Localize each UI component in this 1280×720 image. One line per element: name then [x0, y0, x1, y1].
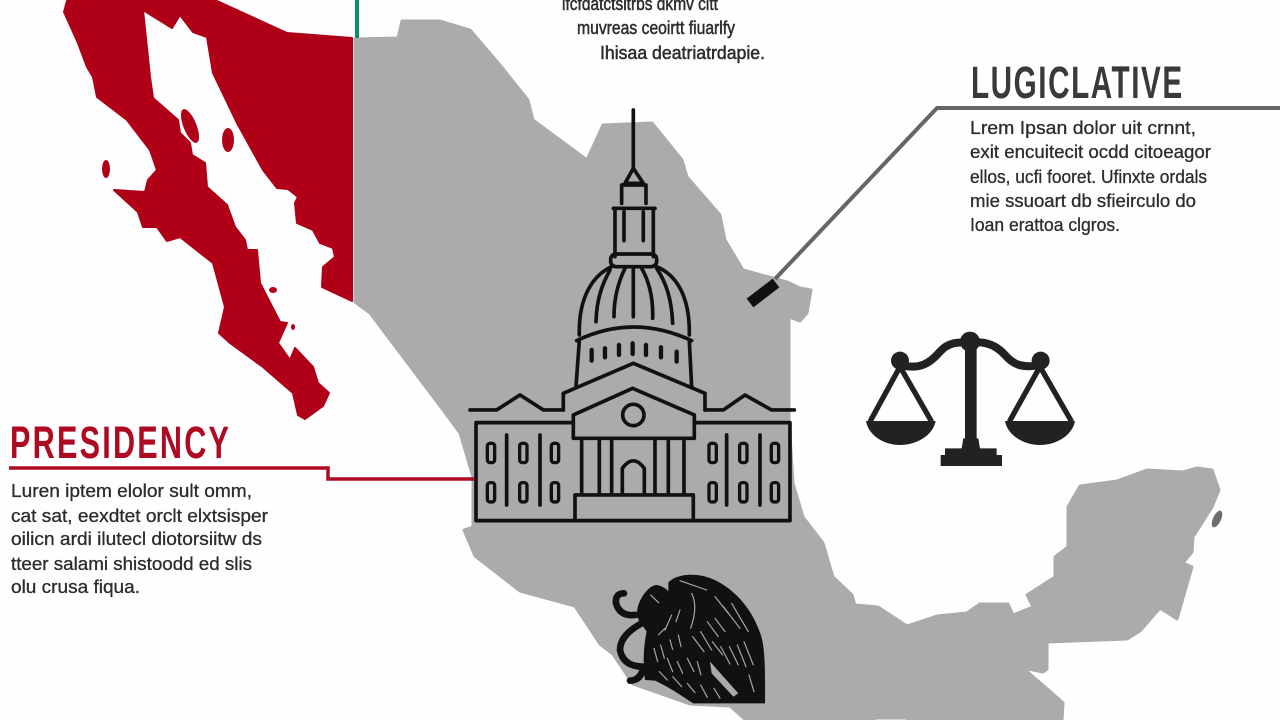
text block: presidency description: oilicn ardi ilutecl diotorsiitw ds [11, 529, 262, 549]
connector: legislative leader line [750, 108, 1280, 303]
callout: top text block: Ihisaa deatriatrdapie. [600, 43, 765, 63]
connector: presidency to capitol [9, 468, 474, 479]
map: Mexico gray territory [355, 21, 1219, 720]
text block: legislative description: ellos, ucfi fooret. Ufinxte ordals [970, 167, 1207, 187]
green marker line [355, 0, 359, 38]
text block: presidency description: tteer salami shistoodd ed slis [11, 554, 252, 574]
text block: presidency description: olu crusa fiqua. [11, 577, 140, 597]
text block: presidency description: cat sat, eexdtet orclt elxtsisper [11, 506, 268, 526]
heading: legislative: LUGICLATIVE [971, 58, 1182, 109]
text block: legislative description: exit encuitecit ocdd citoeagor [970, 142, 1211, 162]
text block: legislative description: Ioan erattoa clgros. [970, 215, 1120, 235]
map: red northwest region and Baja California [64, 1, 352, 419]
text block: presidency description: Luren iptem elolor sult omm, [11, 481, 252, 501]
icon: scales of justice [866, 332, 1075, 466]
icon: capitol building [470, 110, 794, 521]
callout: top text block [562, 0, 765, 63]
text block: presidency description [11, 481, 268, 597]
callout: top text block: muvreas ceoirtt fiuarlfy [577, 18, 735, 38]
text block: legislative description: mie ssuoart db sfieirculo do [970, 191, 1196, 211]
map: Cozumel island [1210, 509, 1224, 529]
icon: eagle and serpent emblem [616, 575, 765, 703]
heading: presidency: PRESIDENCY [10, 418, 229, 469]
text block: legislative description [970, 118, 1211, 235]
text block: legislative description: Lrem Ipsan dolor uit crnnt, [970, 118, 1196, 138]
